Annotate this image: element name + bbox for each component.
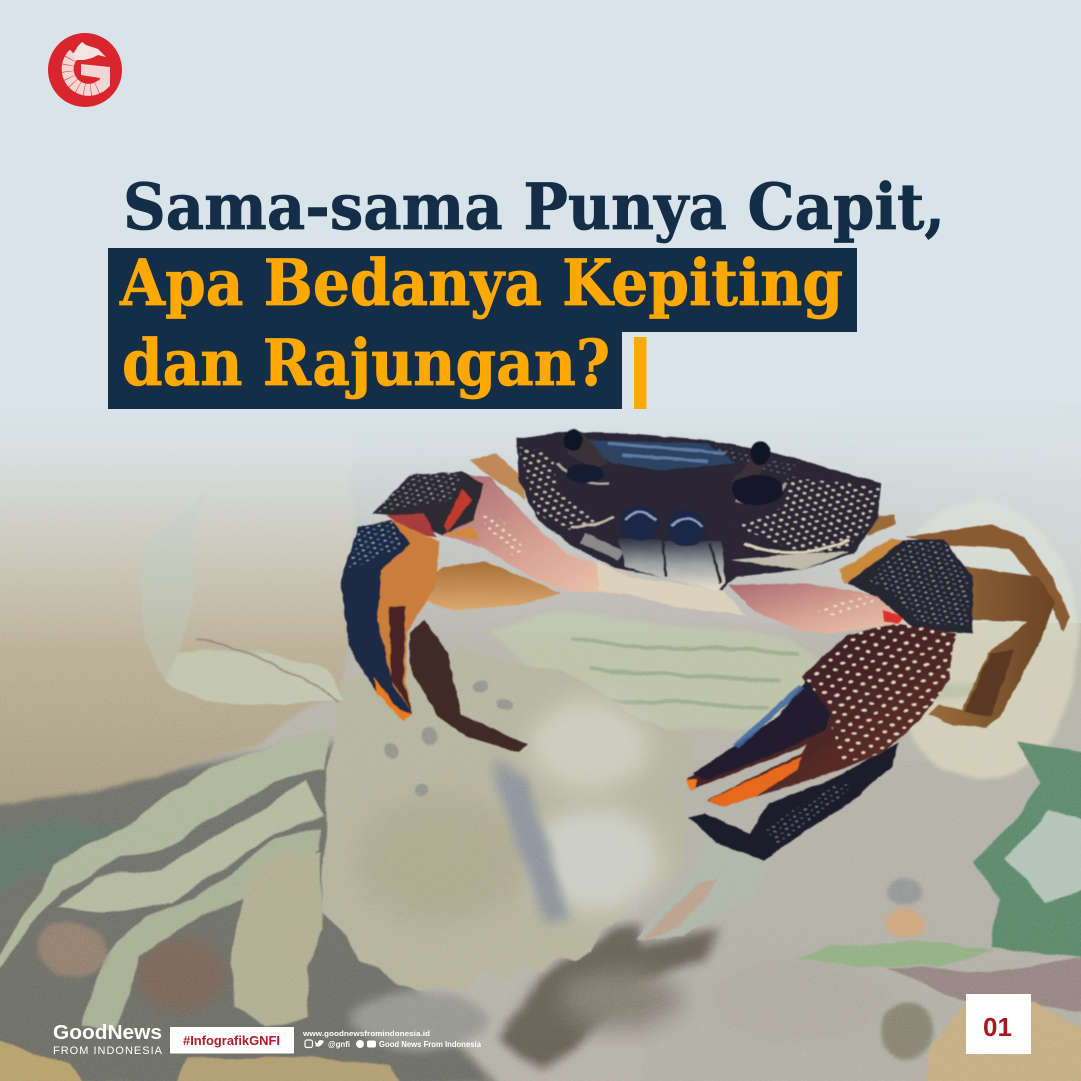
sand texture patches	[710, 960, 890, 1040]
crab: left pink arm	[441, 475, 627, 594]
icon: youtube	[367, 1040, 376, 1048]
green strands in water	[0, 820, 130, 905]
dead crab carapace	[322, 652, 695, 992]
page number box: 01	[983, 1012, 1012, 1042]
crab: back legs	[427, 453, 1070, 727]
brown stones in water	[135, 940, 225, 1010]
water reflections lower centre	[350, 992, 490, 1048]
crab: mouthparts	[618, 506, 725, 590]
golden pebbles along bottom	[923, 1002, 1081, 1081]
footer website and social handles: Good News From Indonesia	[379, 1040, 482, 1049]
carapace gray streak	[490, 760, 570, 925]
carapace dark speckles	[385, 682, 513, 797]
crab: big right claw	[687, 623, 955, 807]
footer brand: GoodNews From Indonesia: GoodNews	[53, 1022, 162, 1044]
crab: lower right pincer	[689, 743, 899, 861]
crab: left lower leg	[409, 620, 528, 752]
page number box	[966, 994, 1031, 1054]
accent bar: orange cursor	[634, 337, 646, 409]
footer website and social handles: @gnfi	[328, 1040, 350, 1049]
submerged green crab legs	[490, 610, 1000, 730]
crab: eyes	[564, 429, 783, 505]
icon: twitter	[315, 1040, 324, 1047]
sandy floor right	[640, 760, 1081, 1081]
logo G bar	[81, 64, 110, 92]
stone in left pool	[38, 922, 106, 978]
footer website and social handles: www.goodnewsfromindonesia.id	[302, 1029, 430, 1038]
footer brand: GoodNews From Indonesia: FROM INDONESIA	[53, 1045, 163, 1057]
footer brand: GoodNews From Indonesia	[53, 1022, 163, 1057]
crab: red joint	[883, 610, 903, 623]
right pebble	[886, 500, 1078, 780]
crab: right arm segment	[847, 539, 973, 633]
title box: dark navy highlight	[108, 248, 857, 409]
background: mist fade over photo	[0, 403, 1081, 1081]
dead crab claw arm	[138, 487, 344, 704]
footer hashtag tag	[170, 1027, 294, 1054]
logo: GNFI red emblem	[48, 33, 122, 107]
crab: sternum	[597, 562, 745, 615]
crab: left arm segment	[372, 472, 483, 540]
background: rock pool photo	[0, 403, 1081, 1081]
background: right side haze	[700, 403, 1081, 623]
dead crab legs	[0, 730, 327, 1030]
crab: left claw	[340, 520, 439, 721]
large sandstone rock	[0, 430, 355, 806]
crab illustration	[340, 429, 1070, 861]
title line 3: dan Rajungan?	[122, 326, 610, 401]
title line 1: Sama-sama Punya Capit,	[123, 170, 945, 245]
dark water left	[0, 740, 500, 1081]
icon: instagram	[305, 1040, 312, 1048]
footer hashtag tag: #InfografikGNFI	[183, 1034, 280, 1048]
logo ring	[68, 54, 103, 90]
mottled dark gap below dead crab	[500, 925, 720, 1070]
carapace pale highlights	[528, 699, 652, 791]
lower claw of dead crab	[636, 837, 771, 940]
green seaweed	[798, 740, 1081, 1012]
background: photographic grain	[0, 440, 1081, 1081]
icon: facebook	[356, 1040, 364, 1048]
title line 2: Apa Bedanya Kepiting	[119, 246, 843, 321]
crab: carapace	[516, 432, 881, 590]
footer website and social handles	[302, 1029, 482, 1049]
logo eagle head	[73, 42, 106, 60]
crab: right pink arm	[729, 583, 905, 633]
